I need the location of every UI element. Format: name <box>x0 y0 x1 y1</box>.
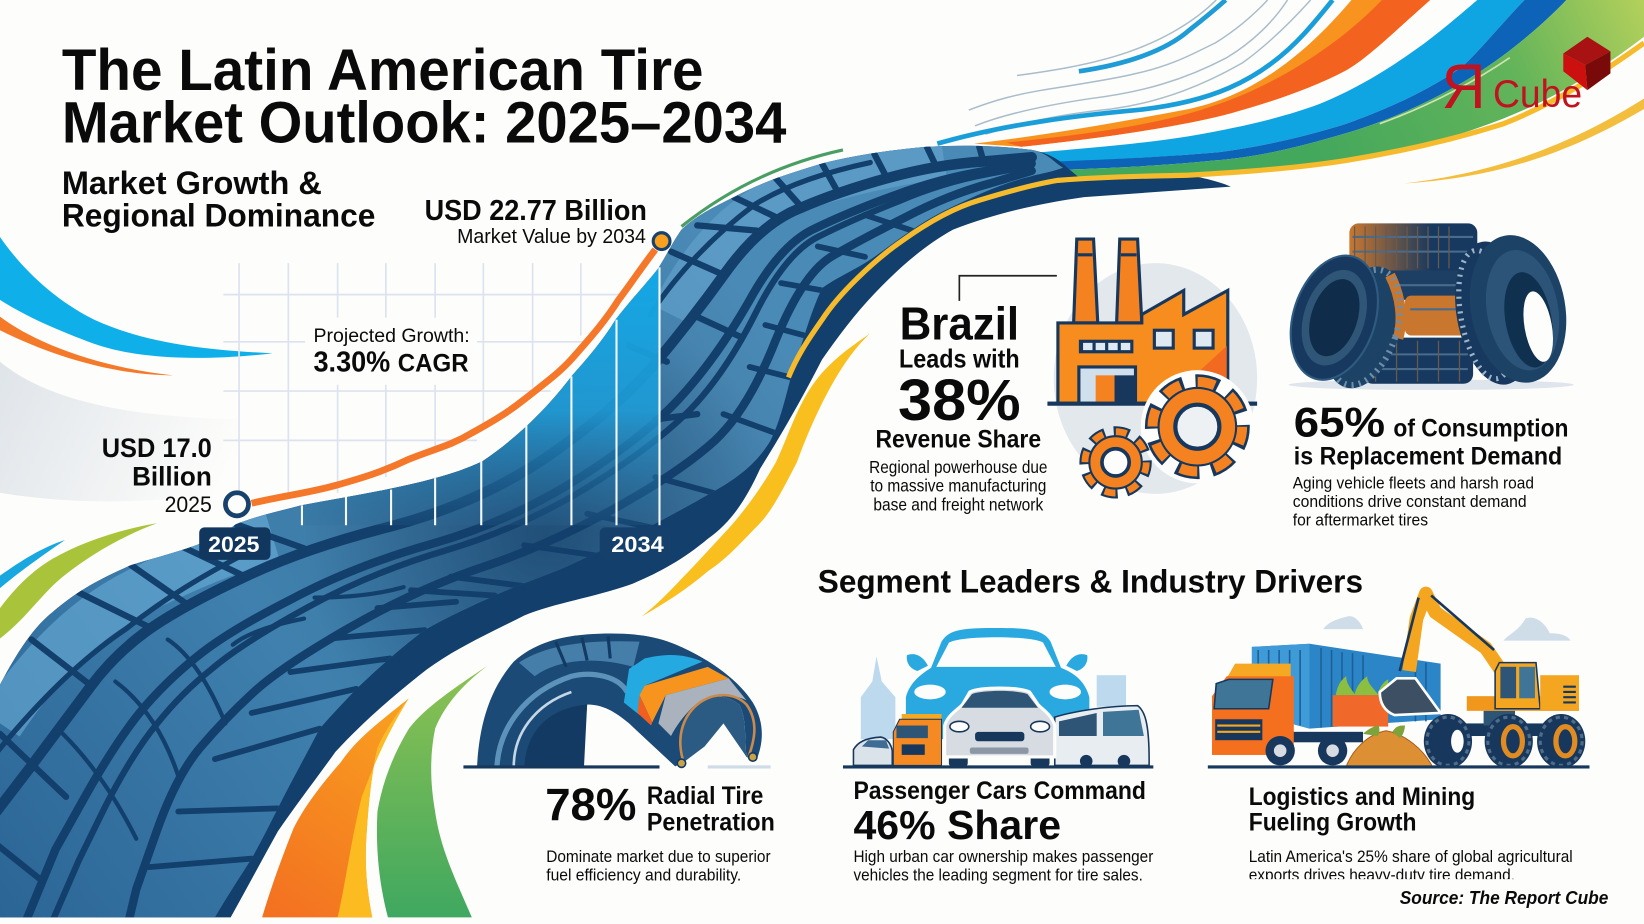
Brazil description: to massive manufacturing <box>870 476 1046 496</box>
source: Source: The Report Cube <box>1400 887 1608 908</box>
ribbon: thin blue arc <box>1079 0 1226 71</box>
year tag 2025: 2025 <box>208 532 259 557</box>
callout: CAGR: Projected Growth: <box>313 325 470 347</box>
ribbon: dark orange <box>1007 0 1430 147</box>
passenger description <box>853 847 1154 884</box>
radial description: Dominate market due to superior <box>546 847 771 866</box>
subtitle: Regional Dominance <box>62 197 375 233</box>
callout: 2034 value: USD 22.77 Billion <box>425 194 647 226</box>
callout: 2025 value <box>102 432 212 517</box>
yellow swoosh beside tire <box>642 333 870 616</box>
callout: 2025 value: Billion <box>132 460 212 491</box>
ribbon: dark blue <box>1033 0 1566 171</box>
small truck <box>893 714 942 765</box>
replacement description: conditions drive constant demand <box>1293 492 1527 511</box>
logo wordmark <box>1442 52 1582 122</box>
callout: 2025 value: 2025 <box>165 492 212 517</box>
title <box>62 38 787 156</box>
icon: truck and excavator <box>1208 593 1589 769</box>
replacement description <box>1293 474 1534 529</box>
passenger description: vehicles the leading segment for tire sales. <box>853 865 1143 884</box>
logistics heading: Logistics and Mining <box>1249 783 1475 811</box>
panel: Brazil <box>869 239 1257 515</box>
callout: 2034 value <box>425 194 647 248</box>
logistics description: Latin America's 25% share of global agricultural <box>1249 847 1573 866</box>
passenger stat: Passenger Cars Command <box>853 777 1146 805</box>
tire sidewall <box>0 146 1231 917</box>
left decorative swooshes <box>0 237 273 639</box>
subtitle <box>62 165 375 233</box>
chassis <box>1258 732 1363 742</box>
callout: 2034 value: Market Value by 2034 <box>457 225 646 248</box>
centre car <box>945 688 1055 766</box>
replacement stat: 65% <box>1294 399 1385 446</box>
chart area white columns <box>302 267 659 525</box>
yellow stripe along tire <box>788 43 1644 377</box>
icon: tire stack <box>1276 223 1577 399</box>
logo cube <box>1563 37 1610 90</box>
connector line <box>959 276 1057 301</box>
container <box>1252 644 1441 729</box>
bottom-left swooshes <box>262 666 488 917</box>
logistics heading: Fueling Growth <box>1249 808 1416 836</box>
Brazil stat: 38% <box>898 368 1021 433</box>
replacement stat <box>1294 399 1569 470</box>
Brazil description <box>869 457 1047 515</box>
callout: 2025 value: USD 17.0 <box>102 432 212 463</box>
Brazil stat <box>875 298 1041 454</box>
radial description <box>546 847 771 884</box>
logo wordmark: Cube <box>1493 73 1582 116</box>
logistics description <box>1249 850 1572 880</box>
passenger stat: 46% Share <box>853 802 1061 848</box>
standing tire <box>1444 227 1577 393</box>
callout: CAGR <box>305 318 477 385</box>
truck cab <box>1212 664 1347 765</box>
year tag 2025 <box>199 527 271 560</box>
title: Market Outlook: 2025–2034 <box>62 91 787 156</box>
passenger stat <box>853 777 1146 848</box>
radial description: fuel efficiency and durability. <box>546 865 741 884</box>
panel: logistics and mining <box>1208 593 1589 885</box>
icon: factory and gears <box>1047 239 1257 494</box>
Brazil description: Regional powerhouse due <box>869 457 1047 477</box>
section heading: Segment Leaders & Industry Drivers <box>818 563 1363 599</box>
radial stat <box>545 779 775 836</box>
radial stat: 78% <box>545 779 636 830</box>
logistics heading <box>1249 783 1475 836</box>
aggregate pile <box>1346 726 1432 766</box>
panel: radial tires <box>463 633 775 884</box>
panel: replacement demand <box>1276 223 1577 529</box>
replacement description: Aging vehicle fleets and harsh road <box>1293 474 1534 493</box>
tire tread band <box>0 136 1231 924</box>
logo wordmark: Я <box>1442 52 1486 122</box>
ribbon: sky blue <box>1033 0 1524 164</box>
callout: CAGR: 3.30% CAGR <box>313 346 469 378</box>
marker 2034 <box>653 233 670 250</box>
replacement stat: is Replacement Demand <box>1294 442 1562 470</box>
ribbon: green <box>1033 0 1644 181</box>
Brazil description: base and freight network <box>873 495 1044 515</box>
radial stat: Penetration <box>647 808 775 836</box>
green accent above tire <box>682 150 843 226</box>
clouds <box>1323 616 1571 641</box>
leaning tire <box>1276 244 1418 399</box>
year tag 2034 <box>600 527 671 560</box>
ribbon: thin blue <box>937 0 1333 144</box>
logo <box>1442 37 1610 122</box>
bus <box>1055 706 1149 767</box>
ribbon: orange <box>974 0 1430 147</box>
year tag 2034: 2034 <box>611 532 664 557</box>
replacement description: for aftermarket tires <box>1293 510 1428 529</box>
Brazil stat: Leads with <box>899 343 1020 373</box>
radial stat: Radial Tire <box>647 782 763 810</box>
excavator <box>1380 593 1585 769</box>
small car <box>853 737 892 765</box>
icon: vehicles <box>843 628 1153 769</box>
growth chart area fill <box>377 269 658 525</box>
Brazil stat: Brazil <box>900 298 1019 350</box>
marker 2025 <box>225 493 248 516</box>
ribbon: lower yellow swoosh <box>1404 99 1644 183</box>
subtitle: Market Growth & <box>62 165 322 201</box>
top-right colour ribbons <box>937 0 1644 183</box>
title: The Latin American Tire <box>62 38 704 103</box>
passenger description: High urban car ownership makes passenger <box>853 847 1154 866</box>
tire tread surface <box>0 136 1080 924</box>
replacement stat: of Consumption <box>1393 415 1569 443</box>
crops box <box>1333 695 1388 727</box>
panel: passenger cars <box>843 628 1154 884</box>
logistics description: exports drives heavy-duty tire demand. <box>1249 866 1515 885</box>
chart gridlines <box>223 263 621 498</box>
Brazil stat: Revenue Share <box>875 426 1041 454</box>
icon: tire cross-section <box>463 633 771 769</box>
growth line <box>252 250 655 503</box>
